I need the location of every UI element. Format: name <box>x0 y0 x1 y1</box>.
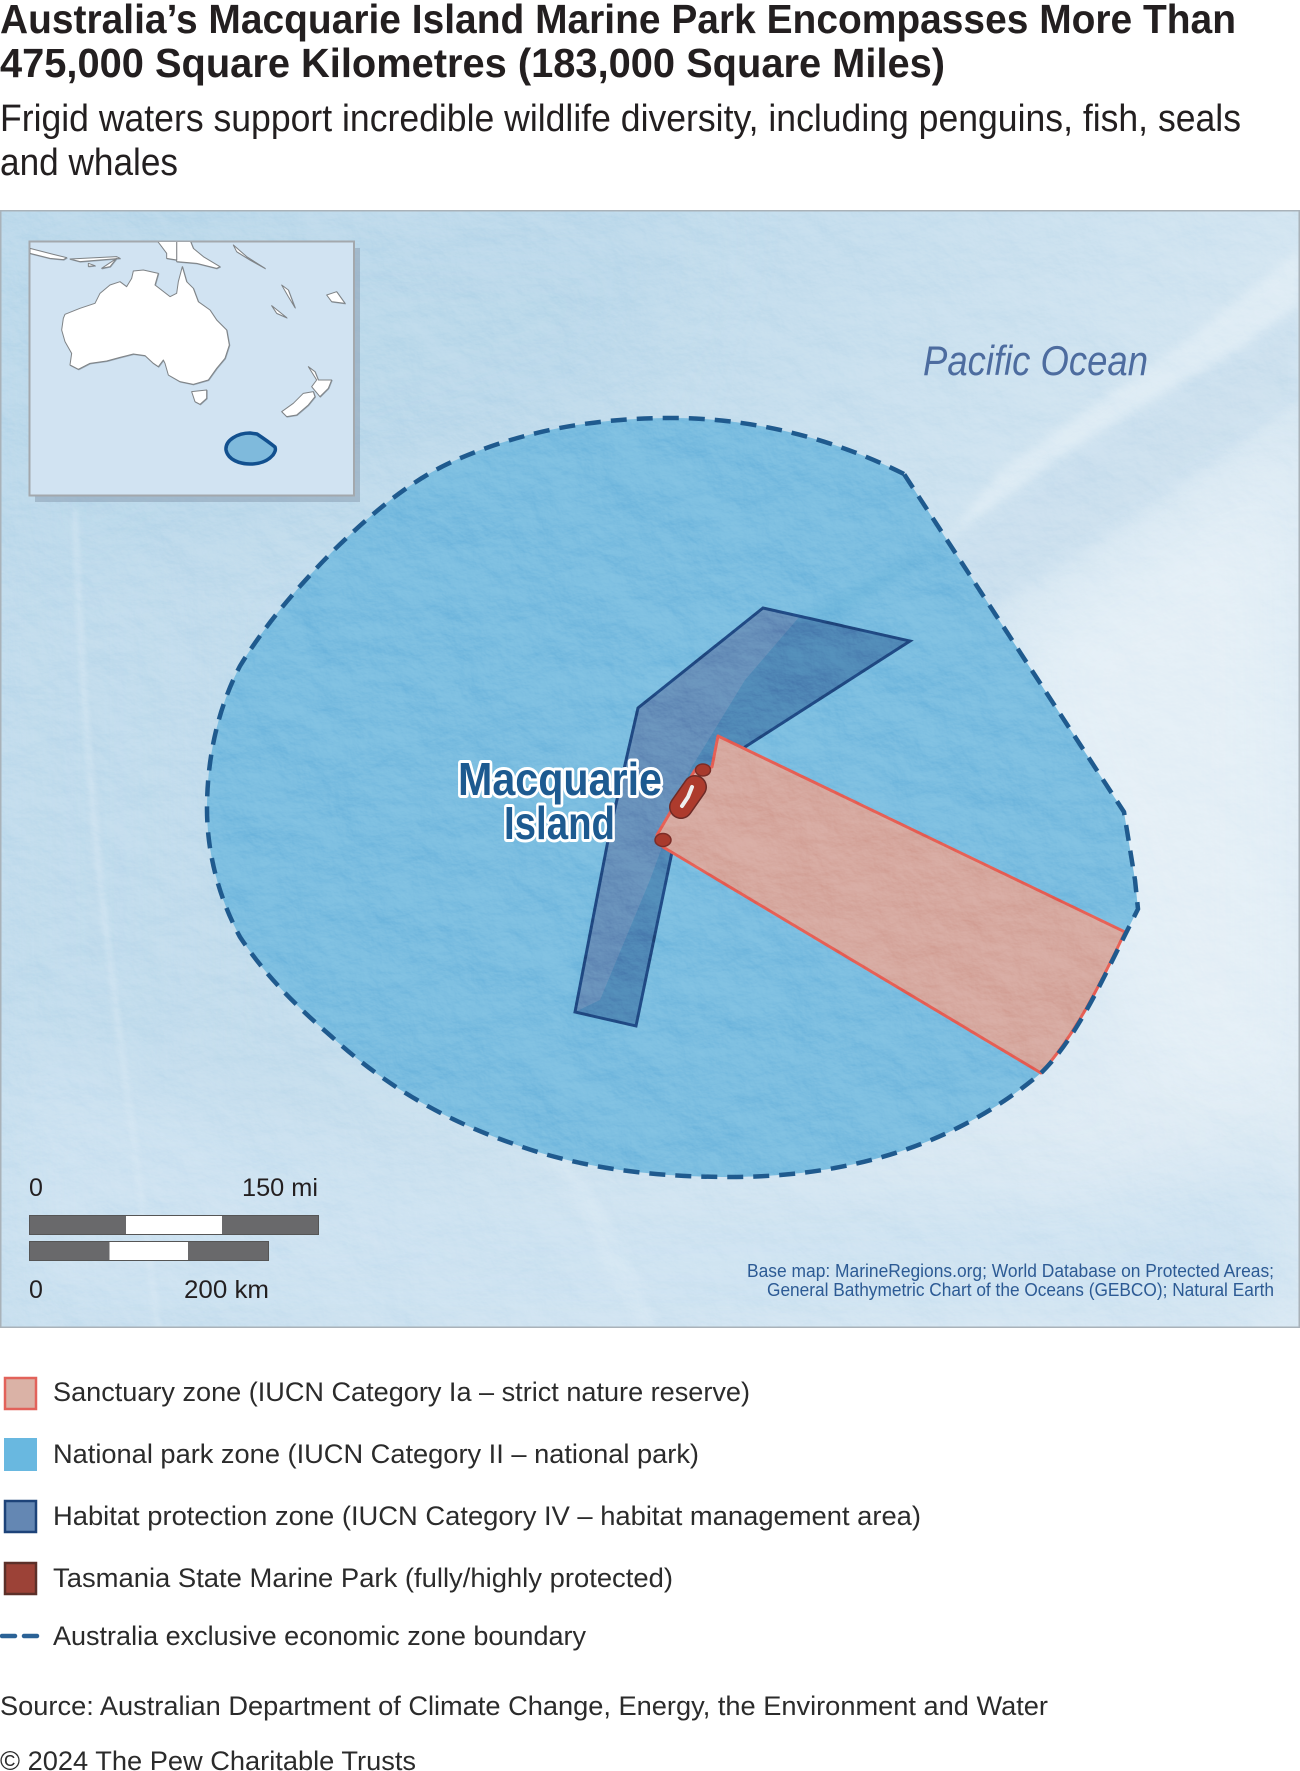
subtitle: and whales <box>0 142 178 184</box>
national park zone <box>207 418 1138 1177</box>
inset locator map <box>30 240 360 502</box>
label: Macquarie Island: Island <box>504 797 615 849</box>
legend: EEZ boundary: Australia exclusive economic zone boundary <box>53 1621 586 1651</box>
land shapes <box>30 240 345 417</box>
Tasmania State Marine Park and Macquarie Island <box>655 764 710 846</box>
label: Pacific Ocean: Pacific Ocean <box>923 337 1148 384</box>
panel: map <box>0 210 1300 1328</box>
EEZ boundary <box>207 418 1138 1177</box>
ridge shading inside national park zone <box>574 568 901 1026</box>
base map credit: General Bathymetric Chart of the Oceans (GEBCO); Natural Earth <box>767 1280 1274 1300</box>
scale bars <box>29 1174 318 1304</box>
habitat protection zone <box>575 608 910 1026</box>
legend: Tasmania State Marine Park: Tasmania State Marine Park (fully/highly protected) <box>53 1563 673 1593</box>
subtitle <box>0 98 1241 184</box>
scale bars: 0 <box>29 1174 43 1202</box>
base map credit <box>747 1261 1274 1300</box>
title: 475,000 Square Kilometres (183,000 Square Miles) <box>0 40 945 86</box>
label: Macquarie Island <box>458 753 662 849</box>
scale bars: 200 km <box>184 1276 269 1304</box>
subtitle: Frigid waters support incredible wildlife diversity, including penguins, fish, seals <box>0 98 1241 140</box>
base map credit: Base map: MarineRegions.org; World Database on Protected Areas; <box>747 1261 1274 1281</box>
map border <box>1 211 1299 1327</box>
legend: national park zone: National park zone (IUCN Category II – national park) <box>53 1439 699 1469</box>
legend <box>2 1377 921 1651</box>
source note: Source: Australian Department of Climate Change, Energy, the Environment and Water <box>0 1691 1048 1721</box>
scale bars: 150 mi <box>242 1174 318 1202</box>
legend: habitat protection zone: Habitat protection zone (IUCN Category IV – habitat management area) <box>53 1501 921 1531</box>
sanctuary zone <box>657 736 1125 1073</box>
seafloor relief texture <box>2 212 1137 1322</box>
ridge <box>75 250 1300 1328</box>
label: Macquarie Island: Macquarie <box>458 753 662 805</box>
scale bars: 0 <box>29 1276 43 1304</box>
title <box>0 0 1236 86</box>
legend: sanctuary zone: Sanctuary zone (IUCN Category Ia – strict nature reserve) <box>53 1377 750 1407</box>
inset: marine park outline <box>226 433 275 464</box>
